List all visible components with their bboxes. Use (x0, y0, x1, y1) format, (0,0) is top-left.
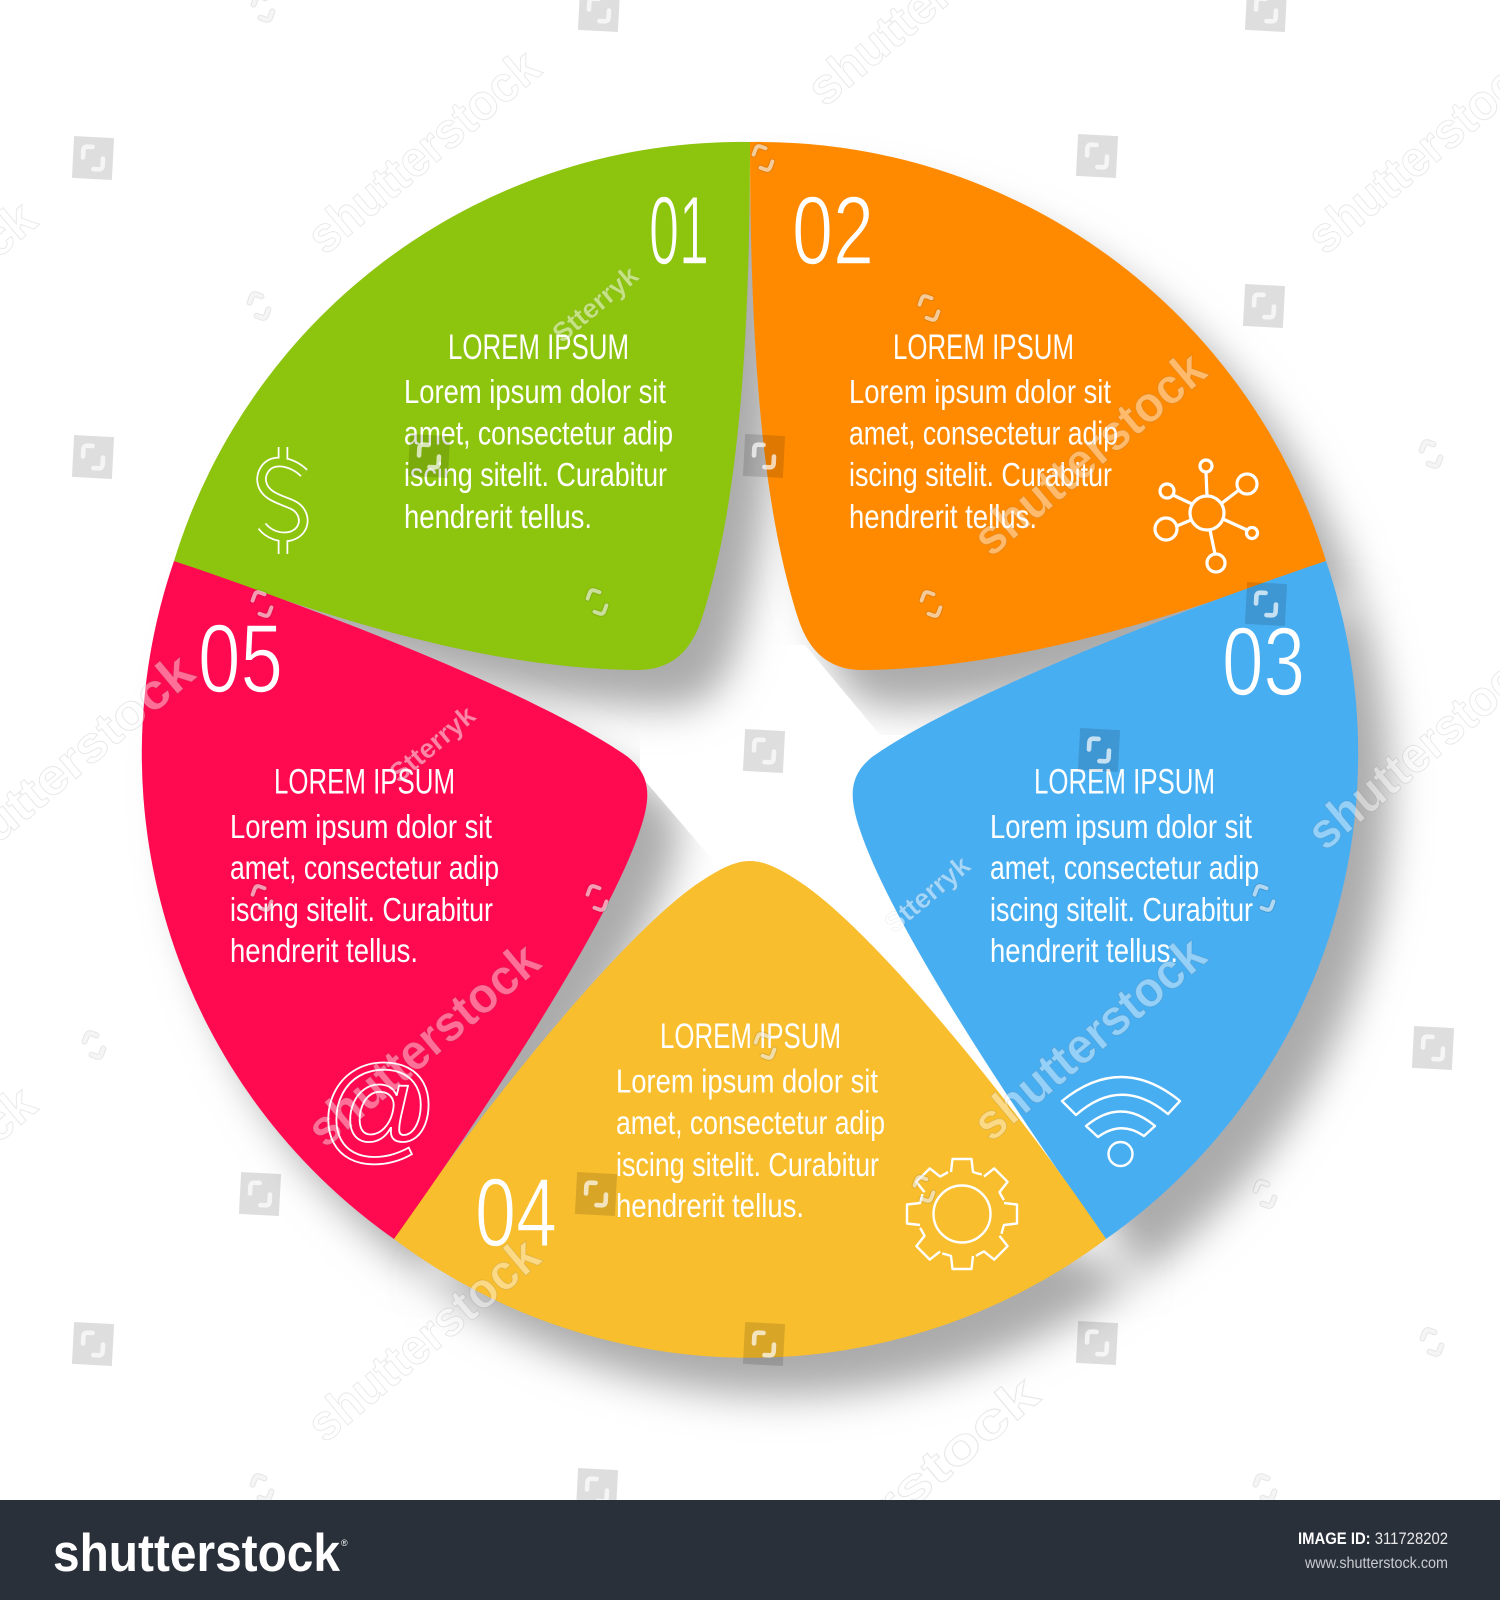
text block 03 (990, 762, 1259, 969)
text block 02: amet, consectetur adip (849, 414, 1118, 452)
text block 03: iscing sitelit. Curabitur (990, 891, 1253, 928)
panel 04: yellow segment (394, 861, 1106, 1358)
watermark layer: shutterstock (962, 340, 1217, 566)
panel 05: red segment (142, 561, 647, 1239)
text block 03: amet, consectetur adip (990, 849, 1259, 886)
text block 05: hendrerit tellus. (230, 932, 418, 969)
footer registered mark: ® (341, 1538, 348, 1548)
icon: gear (907, 1159, 1017, 1269)
panel 03: blue segment (853, 561, 1358, 1239)
icon: wifi (1062, 1077, 1180, 1166)
text block 05: amet, consectetur adip (230, 849, 499, 886)
watermark layer: shutterstock (296, 1226, 551, 1452)
text block 05: LOREM IPSUM (274, 762, 455, 802)
text block 05: Lorem ipsum dolor sit (230, 808, 492, 845)
icon: at sign: @ (319, 1042, 439, 1174)
number 01: 01 (649, 176, 709, 285)
text block 03: LOREM IPSUM (1034, 762, 1215, 802)
text block 04: LOREM IPSUM (660, 1017, 841, 1056)
text block 04: iscing sitelit. Curabitur (616, 1146, 879, 1183)
number 03: 03 (1222, 607, 1305, 716)
text block 03: Lorem ipsum dolor sit (990, 808, 1252, 845)
footer bar (0, 1500, 1500, 1600)
number 05: 05 (198, 604, 283, 713)
text block 02: iscing sitelit. Curabitur (849, 456, 1112, 493)
panel 02: orange segment (750, 142, 1326, 670)
panel 01: green segment (174, 142, 750, 670)
text block 02: Lorem ipsum dolor sit (849, 373, 1111, 410)
footer url: www.shutterstock.com (1304, 1555, 1448, 1572)
watermark layer: Stterryk (547, 259, 645, 349)
text block 01: amet, consectetur adip (404, 414, 673, 452)
watermark layer: shutterstock (962, 925, 1217, 1151)
watermark layer: Stterryk (879, 849, 977, 939)
number 02: 02 (792, 176, 874, 285)
footer image id: IMAGE ID: 311728202 (1298, 1529, 1448, 1548)
text block 01: Lorem ipsum dolor sit (404, 373, 666, 410)
watermark layer: rstock (860, 1365, 1049, 1536)
text block 02 (849, 328, 1118, 535)
text block 04 (616, 1017, 885, 1224)
text block 04: amet, consectetur adip (616, 1104, 885, 1141)
icon: dollar sign (262, 447, 304, 554)
text block 02: hendrerit tellus. (849, 498, 1037, 535)
text block 03: hendrerit tellus. (990, 932, 1178, 969)
number 04: 04 (475, 1158, 557, 1267)
text block 04: hendrerit tellus. (616, 1187, 804, 1224)
footer logo: shutterstock (53, 1524, 340, 1583)
watermark layer: shutterstock (296, 931, 551, 1157)
text block 02: LOREM IPSUM (893, 328, 1074, 367)
text block 01: LOREM IPSUM (448, 328, 629, 367)
watermark layer: Stterryk (384, 699, 482, 789)
text block 01: hendrerit tellus. (404, 498, 592, 535)
text block 01 (404, 328, 673, 535)
cast shadows (174, 180, 1390, 1396)
text block 05 (230, 762, 499, 969)
icon: network hub (1155, 460, 1258, 572)
text block 04: Lorem ipsum dolor sit (616, 1062, 878, 1100)
text block 01: iscing sitelit. Curabitur (404, 456, 667, 493)
text block 05: iscing sitelit. Curabitur (230, 891, 493, 928)
watermark layer: shutterstock (296, 38, 551, 264)
